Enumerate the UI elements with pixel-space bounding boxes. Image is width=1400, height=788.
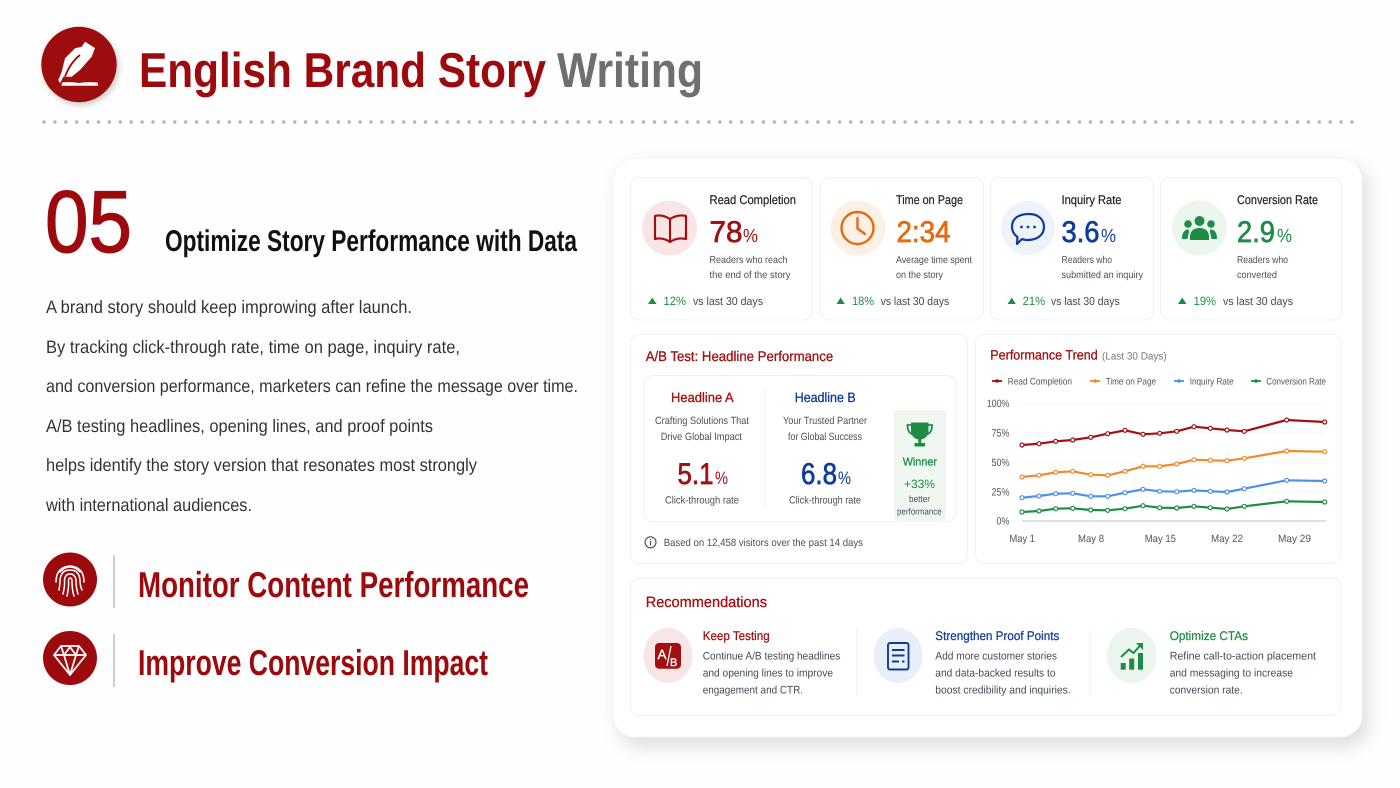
winner badge: better bbox=[909, 494, 930, 504]
recommendation: strengthen proof points: Add more customer stories bbox=[935, 650, 1057, 662]
icon: A/B tile bbox=[655, 643, 681, 669]
panel: time on page card: on the story bbox=[896, 270, 943, 281]
winner badge: performance bbox=[897, 506, 942, 516]
icon: clock bbox=[842, 212, 874, 244]
recommendation: optimize CTAs: conversion rate. bbox=[1170, 684, 1243, 696]
panel: inquiry rate card: vs last 30 days bbox=[1051, 296, 1120, 308]
line chart: 75% bbox=[992, 428, 1010, 440]
line chart: May 22 bbox=[1211, 533, 1243, 545]
panel: A/B test: A/B Test: Headline Performance bbox=[646, 348, 833, 364]
panel: read completion card: Read Completion bbox=[710, 193, 796, 207]
panel: read completion card bbox=[630, 178, 812, 320]
panel: conversion rate card: % bbox=[1277, 226, 1292, 247]
headline B column: for Global Success bbox=[788, 431, 862, 443]
panel: time on page card: 18% bbox=[852, 294, 874, 308]
panel: conversion rate card bbox=[1160, 178, 1342, 320]
recommendation: optimize CTAs: Optimize CTAs bbox=[1170, 629, 1248, 643]
body paragraph: and conversion performance, marketers can refine the message over time. bbox=[46, 376, 578, 396]
recommendation: strengthen proof points bbox=[874, 628, 1071, 696]
panel: inquiry rate card: Readers who bbox=[1062, 255, 1112, 266]
panel: A/B test bbox=[630, 334, 968, 564]
icon: quill and book logo bbox=[41, 27, 117, 102]
headline B column: Headline B bbox=[795, 390, 856, 405]
divider and label: monitor content performance: Monitor Content Performance bbox=[138, 564, 529, 605]
panel: performance trend: Performance Trend bbox=[990, 348, 1098, 362]
line chart: 100% bbox=[987, 398, 1010, 410]
icon: A/B tile: B bbox=[670, 657, 677, 669]
headline A column: Click-through rate bbox=[665, 494, 739, 506]
icon: fingerprint bbox=[43, 552, 97, 606]
headline A column: % bbox=[715, 468, 728, 488]
body paragraph: helps identify the story version that resonates most strongly bbox=[46, 455, 477, 475]
panel: conversion rate card: 2.9 bbox=[1237, 216, 1275, 249]
series: read completion bbox=[1020, 418, 1327, 447]
line chart: May 8 bbox=[1078, 533, 1104, 545]
panel: conversion rate card: vs last 30 days bbox=[1223, 296, 1293, 308]
recommendation: keep testing: Keep Testing bbox=[703, 629, 770, 643]
line chart: 0% bbox=[996, 516, 1010, 528]
panel: conversion rate card: 19% bbox=[1194, 294, 1216, 308]
winner badge bbox=[894, 410, 946, 521]
panel: inquiry rate card bbox=[990, 178, 1154, 320]
panel: recommendations bbox=[630, 578, 1341, 716]
panel: read completion card: vs last 30 days bbox=[693, 296, 763, 308]
icon: diamond bbox=[43, 631, 97, 685]
headline A column: Drive Global Impact bbox=[661, 431, 742, 443]
panel: recommendations: Recommendations bbox=[646, 594, 767, 611]
icon: growth chart bbox=[1121, 643, 1143, 670]
divider and label: improve conversion impact: Improve Conversion Impact bbox=[138, 642, 488, 683]
body paragraph: with international audiences. bbox=[45, 495, 252, 515]
recommendation: strengthen proof points: Strengthen Proof Points bbox=[935, 629, 1059, 643]
panel: performance trend: (Last 30 Days) bbox=[1102, 350, 1167, 362]
headline A column bbox=[655, 390, 749, 506]
panel: time on page card: 2:34 bbox=[896, 216, 950, 249]
panel: time on page card: Average time spent bbox=[896, 255, 972, 266]
headline A column: Headline A bbox=[671, 390, 734, 405]
panel: dashboard bbox=[613, 158, 1362, 737]
panel: time on page card bbox=[820, 178, 984, 320]
chart legend: Conversion Rate bbox=[1266, 376, 1326, 388]
recommendation: optimize CTAs: Refine call-to-action placement bbox=[1170, 650, 1316, 662]
headline B column: % bbox=[838, 468, 851, 488]
icon: people group bbox=[1182, 216, 1217, 240]
panel: performance trend bbox=[976, 334, 1341, 564]
chart legend: Read Completion bbox=[1008, 376, 1072, 388]
panel: time on page card: Time on Page bbox=[896, 193, 963, 207]
section heading: Optimize Story Performance with Data bbox=[165, 225, 577, 258]
body paragraph: A brand story should keep improwing after launch. bbox=[46, 297, 412, 317]
panel: inquiry rate card: Inquiry Rate bbox=[1062, 193, 1122, 207]
recommendation: strengthen proof points: boost credibility and inquiries. bbox=[935, 684, 1071, 696]
panel: time on page card: vs last 30 days bbox=[881, 296, 949, 308]
winner badge: +33% bbox=[904, 477, 935, 491]
panel: conversion rate card: converted bbox=[1237, 270, 1277, 281]
body paragraph: By tracking click-through rate, time on page, inquiry rate, bbox=[46, 337, 460, 357]
icon: document bbox=[888, 643, 908, 670]
line chart: May 15 bbox=[1145, 533, 1176, 545]
headline A column: Crafting Solutions That bbox=[655, 415, 749, 427]
body paragraph: A/B testing headlines, opening lines, and proof points bbox=[46, 416, 433, 436]
chart legend: Time on Page bbox=[1106, 376, 1156, 388]
title: Writing bbox=[557, 44, 703, 98]
chart legend: Inquiry Rate bbox=[1190, 376, 1234, 388]
panel: read completion card: % bbox=[743, 226, 758, 247]
panel: read completion card: Readers who reach bbox=[710, 255, 788, 266]
icon: speech bubble bbox=[1012, 214, 1044, 244]
section number: 05 bbox=[45, 172, 132, 271]
line chart: May 1 bbox=[1010, 533, 1035, 545]
panel: inquiry rate card: 21% bbox=[1023, 294, 1045, 308]
panel: read completion card: the end of the story bbox=[710, 270, 790, 281]
recommendation: keep testing: and opening lines to improve bbox=[703, 668, 833, 680]
line chart: May 29 bbox=[1278, 533, 1311, 545]
icon: open book bbox=[655, 215, 686, 242]
headline A column: 5.1 bbox=[678, 458, 714, 491]
recommendation: keep testing bbox=[644, 628, 841, 696]
winner badge: Winner bbox=[903, 456, 937, 468]
recommendation: keep testing: engagement and CTR. bbox=[703, 684, 803, 696]
headline B column: Your Trusted Partner bbox=[783, 415, 867, 427]
panel: conversion rate card: Readers who bbox=[1237, 255, 1288, 266]
note: sample size: Based on 12,458 visitors over the past 14 days bbox=[664, 537, 863, 549]
series: inquiry rate bbox=[1020, 478, 1327, 500]
series: conversion rate bbox=[1020, 499, 1327, 514]
headline B column: 6.8 bbox=[801, 458, 837, 491]
headline B column bbox=[783, 390, 867, 506]
recommendation: optimize CTAs bbox=[1107, 628, 1316, 696]
panel: inquiry rate card: % bbox=[1101, 226, 1116, 247]
line chart bbox=[987, 398, 1327, 545]
icon: trophy bbox=[908, 422, 932, 446]
title: English Brand Story bbox=[139, 44, 546, 98]
body paragraph bbox=[45, 297, 578, 515]
chart legend bbox=[992, 376, 1326, 388]
recommendation: optimize CTAs: and messaging to increase bbox=[1170, 668, 1293, 680]
panel: read completion card: 78 bbox=[710, 216, 742, 249]
line chart: 50% bbox=[992, 457, 1010, 469]
series: time on page bbox=[1020, 449, 1327, 479]
headline B column: Click-through rate bbox=[789, 494, 861, 506]
line chart: 25% bbox=[992, 486, 1010, 498]
icon: A/B tile: A bbox=[658, 647, 667, 662]
panel: inquiry rate card: 3.6 bbox=[1062, 216, 1100, 249]
recommendation: strengthen proof points: and data-backed results to bbox=[935, 668, 1056, 680]
recommendation: keep testing: Continue A/B testing headlines bbox=[703, 650, 841, 662]
panel: inquiry rate card: submitted an inquiry bbox=[1062, 270, 1143, 281]
panel: conversion rate card: Conversion Rate bbox=[1237, 193, 1318, 207]
panel: read completion card: 12% bbox=[664, 294, 686, 308]
